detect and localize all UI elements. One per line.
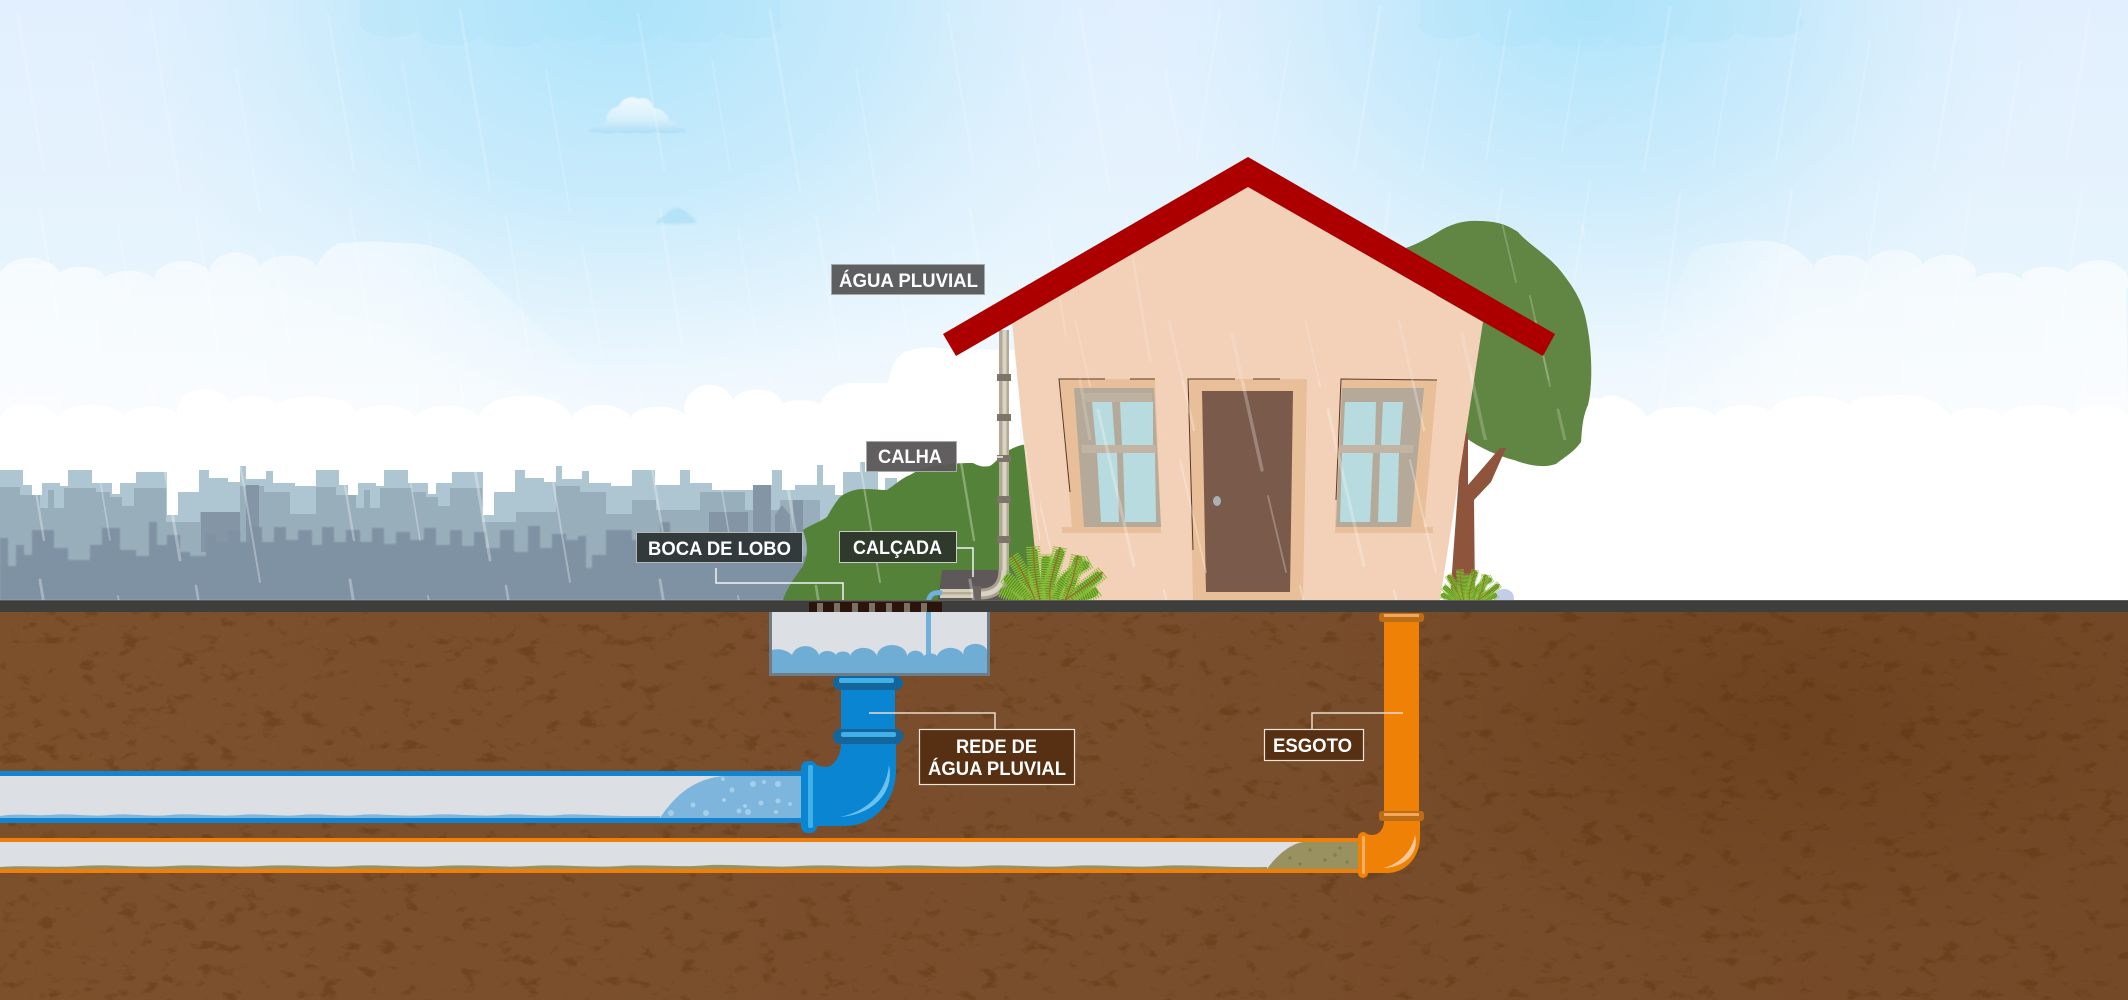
horizontal pipe wall bbox=[0, 838, 1360, 873]
label: água pluvial: ÁGUA PLUVIAL bbox=[839, 270, 978, 292]
house bbox=[1012, 187, 1483, 600]
upper blue cloud scallops bbox=[360, 0, 1804, 47]
leader line: boca de lobo bbox=[716, 568, 843, 600]
label: calha: CALHA bbox=[878, 447, 942, 468]
leader line: calçada bbox=[957, 548, 973, 577]
water stream into catch basin bbox=[928, 593, 942, 655]
door bbox=[1188, 379, 1307, 600]
tree foliage bbox=[1400, 221, 1591, 466]
label: água pluvial bbox=[832, 264, 984, 294]
water inside pipe bbox=[660, 776, 803, 818]
leader line: esgoto bbox=[1312, 713, 1403, 729]
lower collar bbox=[1379, 811, 1424, 821]
rain over house and tree bbox=[1040, 380, 1470, 600]
flange bbox=[1358, 832, 1368, 878]
small shrub near tree bbox=[1441, 569, 1514, 607]
catch basin bbox=[770, 612, 989, 675]
label: esgoto bbox=[1264, 730, 1364, 760]
label: boca de lobo: BOCA DE LOBO bbox=[648, 539, 791, 560]
cloud: large pale back cloud left bbox=[0, 242, 640, 420]
left window bbox=[1059, 379, 1161, 533]
label: rede de água pluvial: ÁGUA PLUVIAL bbox=[928, 758, 1066, 780]
label: boca de lobo bbox=[636, 532, 802, 562]
front white clouds left bbox=[0, 348, 1020, 620]
cloud: small puffy cloud bbox=[588, 97, 687, 134]
downspout gutter pipe bbox=[997, 330, 1011, 574]
leader line: água pluvial bbox=[985, 281, 1003, 298]
bubbles in water bbox=[668, 777, 792, 816]
tree trunk bbox=[1450, 433, 1506, 600]
elbow bbox=[815, 744, 896, 826]
horizontal pipe wall bbox=[0, 771, 803, 823]
house wall bbox=[1012, 187, 1483, 600]
label: rede de água pluvial bbox=[920, 730, 1074, 784]
label: esgoto: ESGOTO bbox=[1273, 736, 1352, 757]
city skyline bbox=[0, 462, 897, 600]
orange sewage pipe bbox=[0, 613, 1424, 878]
rain over upper tree bbox=[1470, 225, 1585, 440]
elbow bbox=[1365, 821, 1420, 873]
storm drain grate bbox=[809, 602, 942, 612]
shrub near downspout bbox=[1000, 546, 1103, 600]
label: calçada: CALÇADA bbox=[853, 538, 942, 559]
label: calha bbox=[866, 442, 956, 472]
basin water bbox=[772, 644, 987, 673]
vertical pipe bbox=[1384, 621, 1419, 812]
sidewalk block bbox=[938, 570, 1012, 600]
sky background bbox=[0, 0, 2128, 620]
large green hedge bbox=[783, 444, 1050, 600]
leader line: calha bbox=[996, 456, 1003, 458]
rain over skyline and hedge bbox=[0, 440, 1040, 600]
front white clouds right bbox=[1400, 395, 2128, 620]
front skyline layer bbox=[0, 522, 820, 600]
cloud: large pale back cloud right bbox=[1620, 240, 2128, 420]
vertical pipe bbox=[841, 688, 895, 732]
road strip bbox=[0, 600, 2128, 612]
cloud: tiny blue cloud bbox=[656, 208, 697, 224]
darker towers bbox=[201, 485, 803, 562]
sewage sludge bbox=[1267, 842, 1360, 869]
right window bbox=[1335, 379, 1437, 533]
rain over left sky bbox=[0, 0, 1180, 440]
rain over distant sky, right bbox=[1180, 0, 2128, 410]
rain over upper house wall and tree bbox=[1040, 320, 1590, 380]
top collar bbox=[1379, 613, 1424, 622]
flange bbox=[801, 761, 817, 833]
cloud: faint wisp right bbox=[1571, 96, 1622, 135]
label: calçada bbox=[840, 532, 956, 562]
lower collar bbox=[833, 729, 903, 744]
label: rede de água pluvial: REDE DE bbox=[956, 737, 1037, 758]
top collar bbox=[833, 676, 903, 690]
blue stormwater pipe bbox=[0, 676, 903, 833]
soil bbox=[0, 612, 2128, 1000]
leader line: rede de água pluvial bbox=[869, 713, 995, 729]
red roof bbox=[943, 157, 1555, 356]
